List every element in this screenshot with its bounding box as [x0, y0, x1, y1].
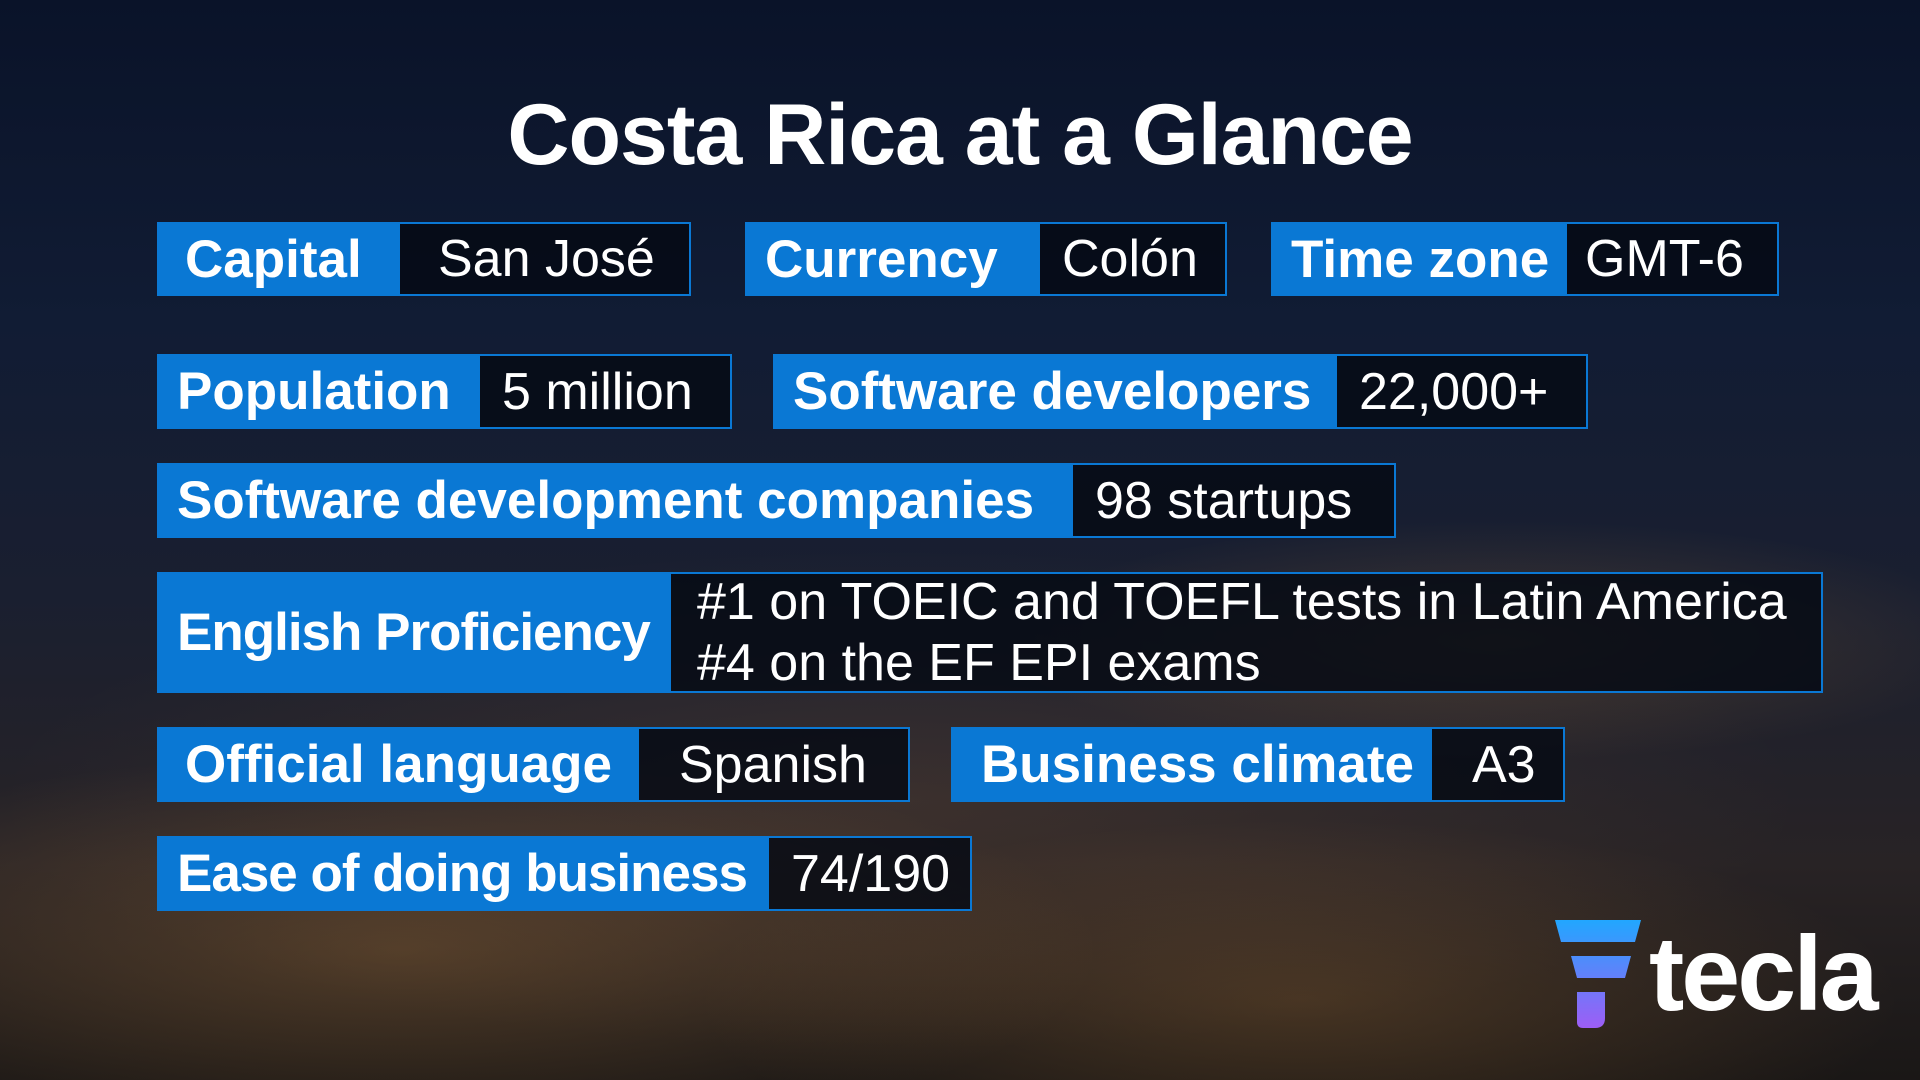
item: population: 5 million	[502, 362, 693, 420]
item: english proficiency: English Proficiency	[177, 603, 650, 662]
item: business climate: A3	[1472, 736, 1536, 794]
item: business climate	[951, 727, 1565, 802]
item: ease of doing business: 74/190	[791, 844, 950, 902]
item: capital	[157, 222, 691, 296]
item: population	[157, 354, 732, 429]
item: capital: San José	[438, 230, 655, 288]
item: software development companies: Software development companies	[177, 471, 1034, 530]
item: software developers	[773, 354, 1588, 429]
item: ease of doing business: Ease of doing business	[177, 844, 747, 903]
icon: logo mark	[1555, 920, 1641, 1028]
logo: tecla	[1555, 914, 1880, 1032]
item: english proficiency: #1 on TOEIC and TOEFL tests in Latin America	[697, 572, 1787, 630]
logo text: tecla	[1649, 914, 1876, 1032]
item: ease of doing business	[157, 836, 972, 911]
item: official language: Spanish	[679, 736, 867, 794]
item: software developers: 22,000+	[1359, 362, 1548, 420]
item: software developers: Software developers	[793, 362, 1311, 421]
item: business climate: Business climate	[981, 735, 1414, 794]
item: english proficiency: #4 on the EF EPI exams	[697, 634, 1261, 692]
item: currency	[745, 222, 1227, 296]
title: Costa Rica at a Glance	[507, 86, 1413, 182]
item: currency: Colón	[1062, 230, 1198, 288]
item: software development companies	[157, 463, 1396, 538]
item: official language	[157, 727, 910, 802]
item: capital: Capital	[185, 230, 362, 288]
item: official language: Official language	[185, 735, 612, 794]
item: time zone: GMT-6	[1585, 230, 1744, 288]
item: time zone: Time zone	[1291, 230, 1549, 288]
item: time zone	[1271, 222, 1779, 296]
item: population: Population	[177, 362, 451, 421]
item: software development companies: 98 startups	[1095, 472, 1352, 530]
item: english proficiency	[157, 572, 1823, 693]
item: currency: Currency	[765, 230, 998, 288]
